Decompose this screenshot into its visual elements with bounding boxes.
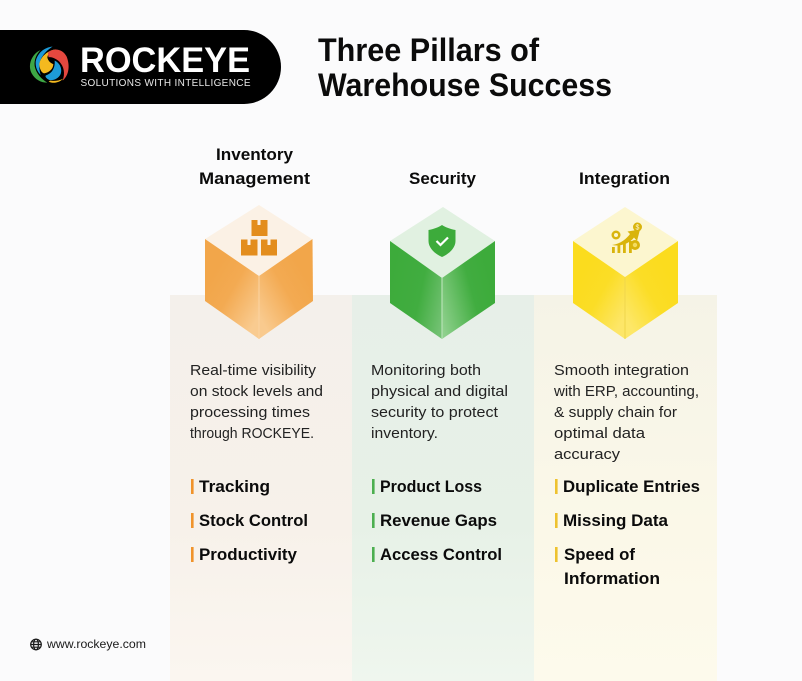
text block: inventory description: through ROCKEYE. xyxy=(190,426,314,442)
panel: integration column xyxy=(534,295,717,681)
list: security pillars: Revenue Gaps xyxy=(380,511,497,530)
list: inventory pillars: Stock Control xyxy=(199,511,308,530)
text block: integration description: & supply chain for xyxy=(554,405,677,421)
heading: inventory management: Management xyxy=(199,170,311,188)
heading: security: Security xyxy=(409,170,477,188)
text block: integration description: accuracy xyxy=(554,447,621,463)
list: integration pillars: Speed of xyxy=(564,545,635,564)
icon: stacked boxes xyxy=(241,220,277,256)
text block: integration description: optimal data xyxy=(554,426,646,442)
text block: integration description xyxy=(553,363,699,463)
text block: integration description: with ERP, accounting, xyxy=(553,384,699,400)
heading: integration: Integration xyxy=(579,170,670,188)
list: security pillars xyxy=(372,477,502,564)
icon: globe xyxy=(31,639,41,650)
cube: inventory xyxy=(205,205,313,339)
panel: security column xyxy=(352,295,534,681)
logo wordmark: ROCKEYE xyxy=(80,41,250,80)
list: security pillars: Access Control xyxy=(380,545,502,564)
list: integration pillars: Information xyxy=(564,569,660,588)
text block: integration description: Smooth integration xyxy=(554,363,689,379)
title: Warehouse Success xyxy=(318,67,612,103)
text block: security description: physical and digital xyxy=(371,384,508,400)
text block: inventory description: processing times xyxy=(190,405,310,421)
title: Three Pillars of xyxy=(318,32,539,68)
text block: security description: Monitoring both xyxy=(371,363,481,379)
panel: inventory management column xyxy=(170,295,352,681)
icon: rockeye swirl xyxy=(30,47,69,83)
list: inventory pillars: Productivity xyxy=(199,545,298,564)
heading: inventory management xyxy=(199,146,311,188)
text block: security description: security to protect xyxy=(371,405,498,421)
icon: growth chart with coins: $ xyxy=(636,224,640,232)
list: integration pillars: Duplicate Entries xyxy=(563,477,700,496)
text block: inventory description xyxy=(190,363,323,442)
text block: inventory description: on stock levels and xyxy=(190,384,323,400)
icon: shield check xyxy=(428,225,456,257)
list: integration pillars xyxy=(555,477,700,588)
text block: security description xyxy=(371,363,508,442)
cube: security xyxy=(390,207,495,339)
list: inventory pillars xyxy=(191,477,308,564)
text block: security description: inventory. xyxy=(371,426,438,442)
cube: integration xyxy=(573,207,678,339)
list: security pillars: Product Loss xyxy=(380,477,482,496)
list: inventory pillars: Tracking xyxy=(199,477,270,496)
logo banner xyxy=(0,30,281,104)
list: integration pillars: Missing Data xyxy=(563,511,669,530)
logo tagline: SOLUTIONS WITH INTELLIGENCE xyxy=(80,78,251,89)
title xyxy=(318,32,612,103)
text block: inventory description: Real-time visibility xyxy=(190,363,317,379)
heading: inventory management: Inventory xyxy=(216,146,294,164)
website footer: www.rockeye.com xyxy=(46,637,146,651)
